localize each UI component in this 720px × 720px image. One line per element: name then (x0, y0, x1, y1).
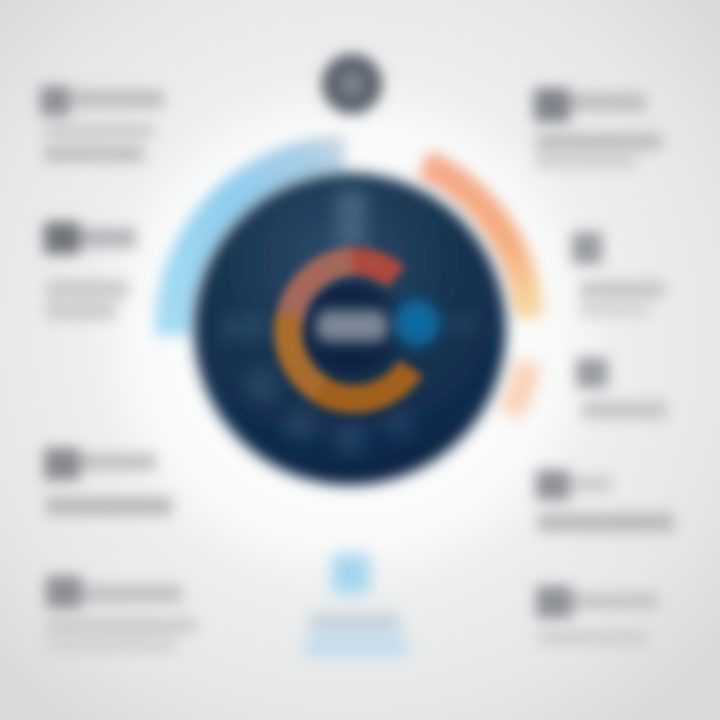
panel: lower-left text block (44, 448, 172, 515)
panel: bottom-right text block (536, 586, 658, 645)
icon: top dark badge (322, 54, 382, 114)
central dark disc (194, 173, 506, 485)
panel: middle-left text block (44, 222, 136, 320)
panel: top-right text block (534, 88, 662, 168)
orange arc (424, 164, 529, 318)
panel: top-left text block (40, 86, 164, 162)
panel: bottom-left text block (46, 576, 196, 652)
panel: lower-right text block (536, 470, 674, 532)
bottom caption (304, 614, 408, 656)
center label (316, 310, 388, 342)
panel: upper-middle-right text block (572, 232, 665, 317)
panel: lower-middle-right text block (576, 358, 667, 419)
center dark hub (302, 281, 398, 377)
blue dot (394, 300, 440, 346)
blue arc (175, 155, 345, 335)
icon: bottom blue badge (332, 554, 370, 594)
disc inner spokes (222, 190, 477, 456)
small peach arc (510, 362, 528, 414)
inner C ring (288, 261, 411, 399)
